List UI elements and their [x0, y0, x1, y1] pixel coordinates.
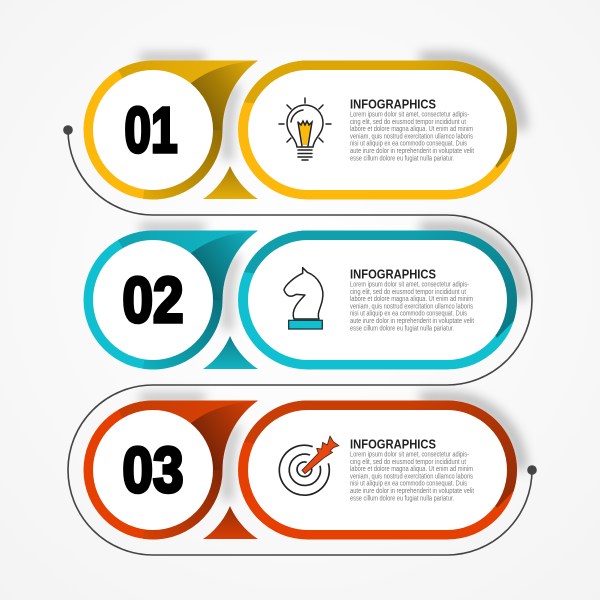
text block 02: nisi ut aliquip ex ea commodo consequat. Duis — [350, 311, 467, 318]
panel: step 01 — [84, 58, 521, 200]
text block 01: cing elit, sed do eiusmod tempor incididunt ut — [350, 119, 466, 126]
text block 02: Lorem ipsum dolor sit amet, consectetur adipis- — [350, 282, 469, 288]
text block 03: veniam, quis nostrud exercitation ullamco laboris — [350, 473, 473, 480]
number 03: 03 — [122, 434, 184, 506]
lower triangle 02 — [203, 336, 258, 369]
text block 03: aute irure dolor in reprehenderit in voluptate velit — [350, 488, 474, 495]
number ring 03 — [84, 400, 258, 540]
panel: step 02 — [84, 228, 521, 370]
number ring 02 — [84, 230, 258, 370]
text block 02: esse cillum dolore eu fugiat nulla pariatur. — [350, 325, 454, 332]
text block 01: nisi ut aliquip ex ea commodo consequat. Duis — [350, 141, 467, 148]
text block 01: veniam, quis nostrud exercitation ullamco laboris — [350, 133, 473, 140]
text block 01: labore et dolore magna aliqua. Ut enim ad minim — [350, 126, 473, 133]
icon: target with arrow — [279, 436, 339, 495]
content pill 03 — [238, 400, 517, 540]
text block 03 — [350, 452, 474, 502]
number 01: 01 — [124, 94, 178, 166]
text block 02 — [350, 282, 474, 332]
text block 03: nisi ut aliquip ex ea commodo consequat. Duis — [350, 481, 467, 488]
text block 01 — [350, 112, 474, 162]
text block 03: cing elit, sed do eiusmod tempor incididunt ut — [350, 459, 466, 466]
heading 02: INFOGRAPHICS — [350, 268, 436, 282]
icon: light bulb — [279, 98, 331, 160]
content pill 01 — [238, 60, 517, 200]
text block 02: cing elit, sed do eiusmod tempor incididunt ut — [350, 289, 466, 296]
number 02: 02 — [122, 264, 184, 336]
heading 01: INFOGRAPHICS — [350, 98, 436, 112]
icon: chess knight — [284, 268, 323, 329]
shadow of step 03 — [140, 398, 521, 500]
text block 01: Lorem ipsum dolor sit amet, consectetur adipis- — [350, 112, 469, 118]
shadow of step 02 — [140, 228, 521, 330]
content pill 02 — [238, 230, 517, 370]
text block 03: esse cillum dolore eu fugiat nulla pariatur. — [350, 495, 454, 502]
text block 01: esse cillum dolore eu fugiat nulla pariatur. — [350, 155, 454, 162]
text block 03: Lorem ipsum dolor sit amet, consectetur adipis- — [350, 452, 469, 458]
text block 03: labore et dolore magna aliqua. Ut enim ad minim — [350, 466, 473, 473]
number ring 01 — [84, 60, 258, 200]
heading 03: INFOGRAPHICS — [350, 438, 436, 452]
text block 01: aute irure dolor in reprehenderit in voluptate velit — [350, 148, 474, 155]
lower triangle 01 — [203, 166, 258, 199]
shadow of step 01 — [140, 58, 521, 160]
text block 02: veniam, quis nostrud exercitation ullamco laboris — [350, 303, 473, 310]
lower triangle 03 — [203, 506, 258, 539]
connector line with end dots — [63, 125, 537, 555]
text block 02: aute irure dolor in reprehenderit in voluptate velit — [350, 318, 474, 325]
panel: step 03 — [84, 398, 521, 540]
text block 02: labore et dolore magna aliqua. Ut enim ad minim — [350, 296, 473, 303]
